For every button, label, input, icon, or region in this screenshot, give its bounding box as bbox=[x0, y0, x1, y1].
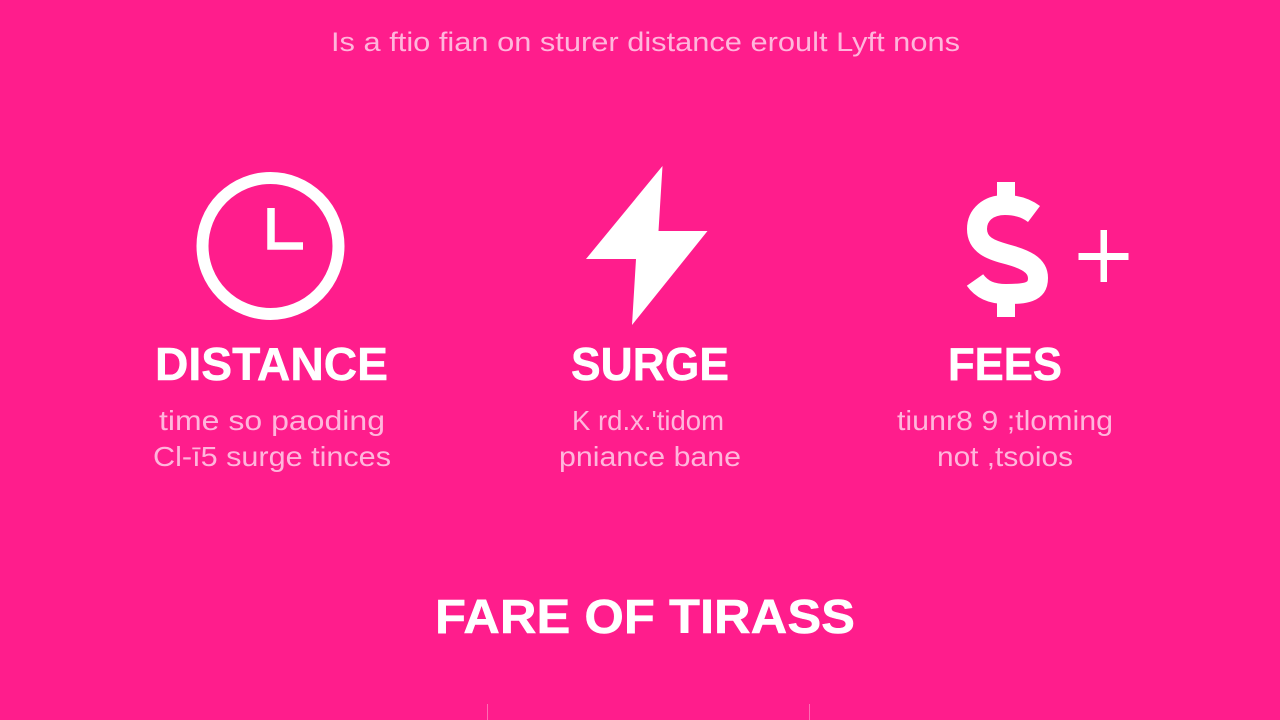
text: fees description bbox=[897, 405, 1113, 472]
icon: lightning bolt bbox=[586, 166, 708, 325]
text: distance description bbox=[153, 405, 391, 472]
text: surge description bbox=[559, 405, 741, 472]
footer heading: FARE OF TIRASS bbox=[435, 591, 855, 644]
text: fees description: tiunr8 9 ;tloming bbox=[897, 405, 1113, 436]
heading: fees: FEES bbox=[948, 338, 1062, 390]
text: distance description: time so paoding bbox=[159, 405, 385, 436]
heading: distance: DISTANCE bbox=[155, 338, 388, 390]
text: surge description: pniance bane bbox=[559, 441, 741, 472]
icon: dollar plus bbox=[975, 182, 1128, 317]
panel: surge bbox=[559, 166, 741, 472]
title: Is a ftio fian on sturer distance eroult Lyft nons bbox=[331, 27, 960, 57]
panel: fees bbox=[897, 182, 1128, 472]
text: distance description: Cl-ī5 surge tinces bbox=[153, 441, 391, 472]
panel: distance bbox=[153, 178, 391, 472]
icon: clock bbox=[202, 178, 338, 314]
text: surge description: K rd.x.'tidom bbox=[572, 405, 724, 436]
text: fees description: not ,tsoios bbox=[937, 441, 1073, 472]
heading: surge: SURGE bbox=[571, 338, 729, 390]
